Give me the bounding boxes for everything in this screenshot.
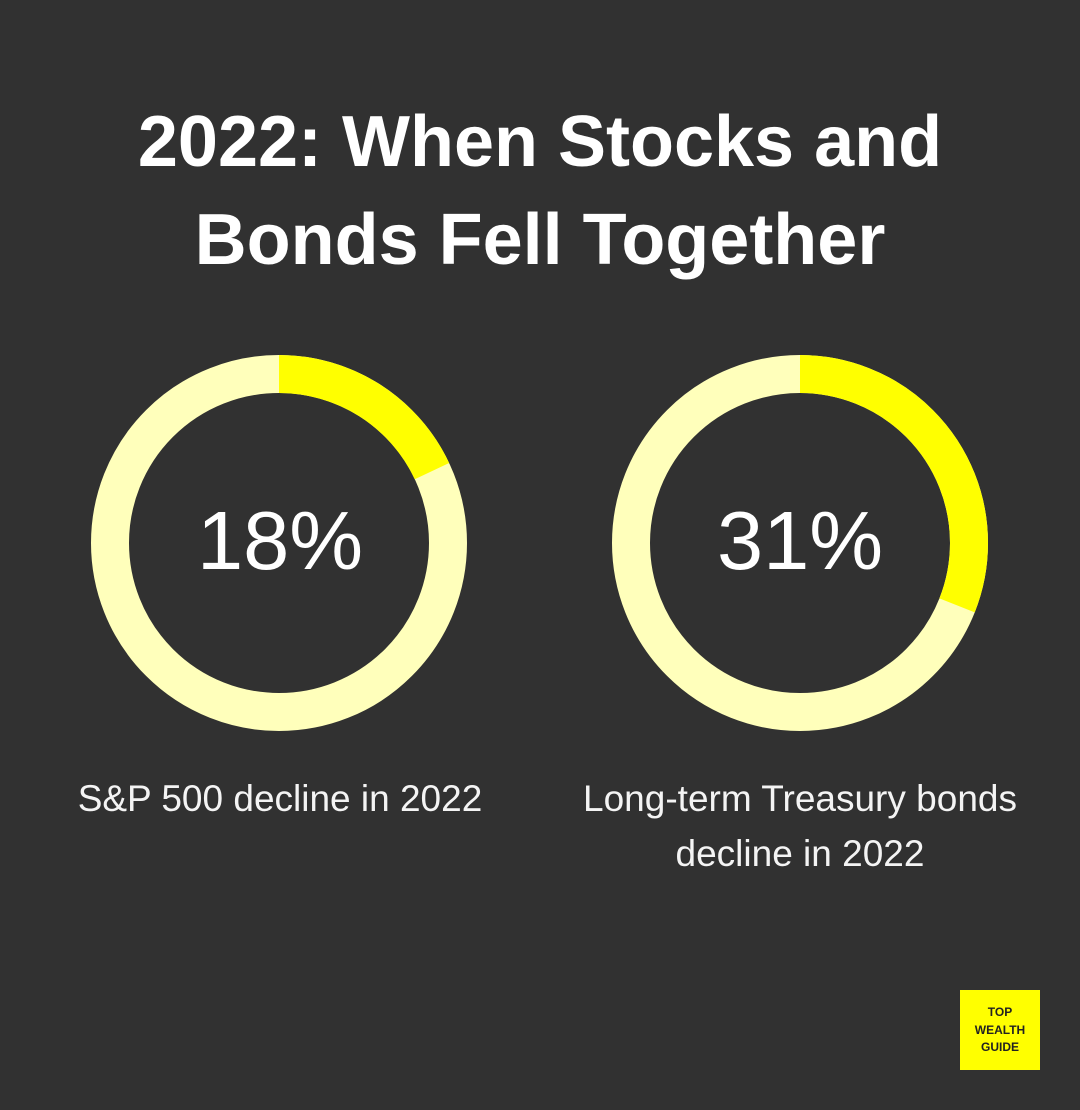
title: 2022: When Stocks and [138,102,942,182]
logo: TOP [988,1005,1012,1019]
logo [960,990,1040,1070]
chart: S&P 500 18%: 18% [197,494,363,587]
chart: S&P 500 18% [110,374,448,712]
caption: bonds: Long-term Treasury bonds [583,778,1017,819]
logo: GUIDE [981,1040,1019,1054]
title [138,102,942,280]
chart: Treasury bonds 31%: 31% [717,494,883,587]
title: Bonds Fell Together [195,200,885,280]
caption: bonds [583,778,1017,874]
caption: S&P: S&P 500 decline in 2022 [78,778,482,819]
chart: Treasury bonds 31% [631,374,969,712]
caption: bonds: decline in 2022 [676,833,924,874]
logo: WEALTH [975,1022,1025,1036]
